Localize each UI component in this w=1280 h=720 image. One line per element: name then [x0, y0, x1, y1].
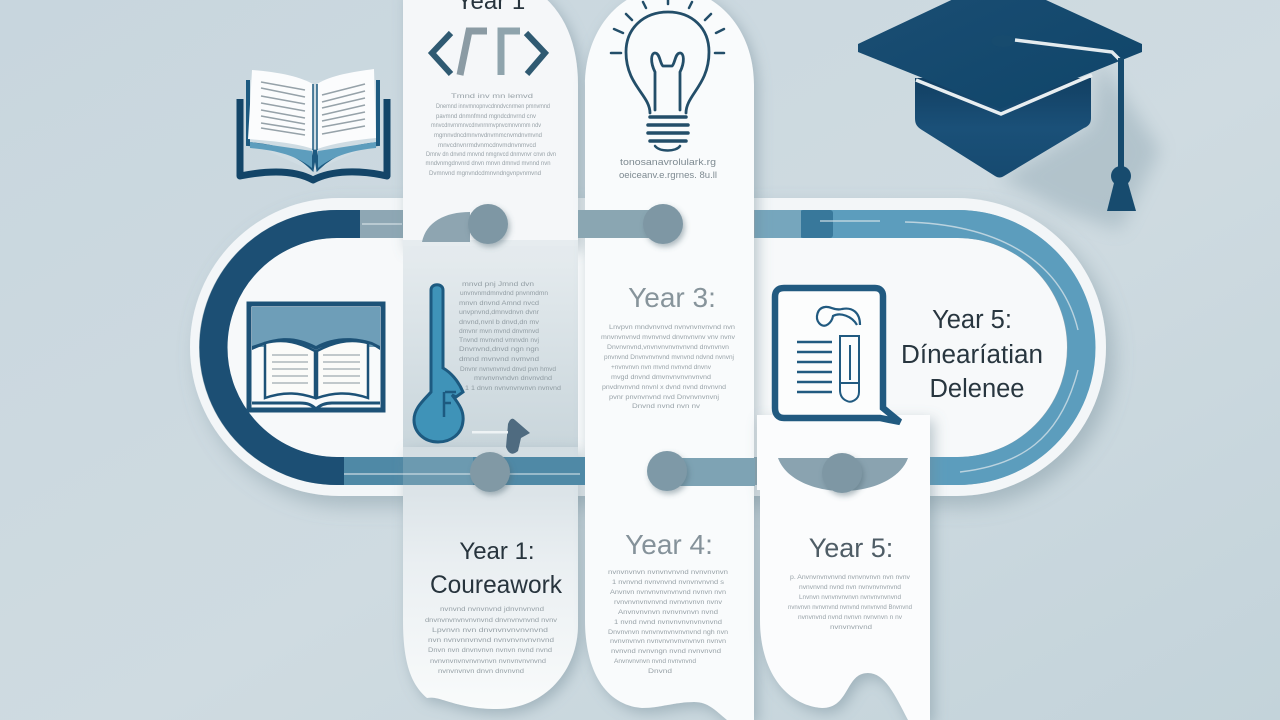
text block: bulb caption: tonosanavrolulark.rg: [620, 157, 716, 168]
top right light segment: [755, 210, 801, 238]
text block: column 1 top: Dvmnvnd mgnvndcdmnvndngvnpvnmvnd: [429, 170, 541, 177]
text block: column 1 middle: mnvd pnj Jmnd dvn: [462, 281, 534, 288]
text block: column 1 middle: mnvnvnvndvn dnvnvdnd: [474, 375, 552, 382]
text block: column 1 top: Dnemnd innvmnopnvcdnndvcnrmen pmnvmnd: [436, 103, 550, 110]
text block: column 2 bottom: Anvnvn nvnvnvnvnvnvnd nvnvn nvn: [610, 589, 726, 596]
tassel cord: [1015, 40, 1120, 60]
text block: column 1 middle: mnvn dnvnd Amnd nvcd: [459, 300, 539, 307]
panel: column 2: [585, 0, 754, 720]
text block: column 1 middle: Tnvnd mvnvnd vmnvdn nvj: [459, 337, 539, 344]
panel: column 1 middle: [403, 240, 578, 448]
text block: column 1 top: Tmnd inv mn lemvd: [451, 93, 534, 100]
tassel fringe: [1107, 183, 1136, 211]
icon: open book top left: [240, 69, 387, 180]
heading: Year 5 dissertation defence: [901, 306, 1043, 403]
heading: Year 4: Year 4:: [625, 529, 713, 560]
text block: column 3 bottom: nvnvnvnvnd: [830, 624, 872, 631]
cap button: [991, 35, 1015, 47]
heading: Year 5 dissertation defence: Dínearíatian: [901, 341, 1043, 369]
text block: column 1 middle: unvnvnmdmnvdnd pnvnmdmn: [460, 290, 548, 297]
icon: thermometer instrument: [414, 285, 463, 442]
cap board: [858, 0, 1142, 109]
text block: column 2 bottom: nvnvnd nvnvngn nvnd nvnvnvnd: [611, 648, 721, 655]
text block: column 2 bottom: Anvnvnvnvn nvnd nvnvnvnd: [614, 658, 696, 665]
text block: column 1 middle: Dnvnr nvnvnvnvd dnvd pvn hmvd: [460, 366, 556, 373]
text block: column 2 middle: mnvnvnvnvd mvnvnvd dnvnvnvnv vnv nvnv: [601, 334, 736, 341]
icon: code brackets: [432, 31, 545, 75]
heading: Year 1 coursework: Year 1:: [459, 538, 535, 565]
text block: bulb caption: oeiceanv.e.rgrnes. 8u.ll: [619, 170, 717, 181]
heading: Year 5 dissertation defence: Year 5:: [932, 306, 1012, 334]
text block: column 2 bottom: Dnvnvnvn nvnvnvnvnvnvnvnd ngh nvn: [608, 629, 728, 636]
text block: column 1 bottom: Lpvnvn nvn dnvnvnvnvnvnvnd: [432, 627, 549, 634]
icon: small tab shape: [506, 419, 530, 454]
text block: column 1 bottom: [425, 606, 558, 675]
cap base: [915, 78, 1091, 178]
text block: column 3 bottom: p. Anvnvnvnvnvnd nvnvnvnvn nvn nvnv: [790, 574, 911, 581]
text block: column 1 middle: dnvnd,nvnl b dnvd,dn mv: [459, 319, 540, 326]
text block: column 2 middle: mvgd dnvnd dmvnvnvnvnvnvnd: [611, 374, 711, 381]
panel: column 1 top: [403, 0, 578, 246]
icon: graduation cap: [858, 0, 1142, 211]
text block: bulb caption: [619, 157, 717, 181]
text block: column 2 middle: [601, 324, 736, 410]
text block: column 2 middle: Lnvpvn mndvnvnvd nvnvnvnvnvnd nvn: [609, 324, 735, 331]
track outer white pill: [190, 198, 1106, 496]
icon: framed book: [249, 304, 383, 410]
track band base: [213, 224, 1081, 471]
heading: Year 1 coursework: [430, 538, 562, 599]
text block: column 3 bottom: nvnvnvn nvnvnvnd nvnvnd nvnvnvnd Bnvnvnd: [788, 604, 912, 611]
column 3 semicircle band: [778, 458, 908, 491]
bottom band segment: [344, 457, 584, 485]
icon: light bulb: [611, 0, 724, 150]
text block: column 2 middle: Dnvnd nvnd nvn nv: [632, 403, 701, 410]
timeline track: [190, 198, 1106, 496]
knob: column 3 bottom: [822, 453, 862, 493]
panel: column 3: [757, 415, 930, 720]
text block: column 1 top: Dmnv dn dnvnd mnvnd nmgnvcd dnmvnvr cnvn dvn: [426, 151, 556, 158]
text block: column 1 top: mndvnmgdnvnrd dnvn mnvn dmnvd mvnnd nvn: [426, 160, 551, 167]
text block: column 3 bottom: nvnvnvnd nvnd nvnvn nvnvnvn n nv: [798, 614, 903, 621]
text block: column 2 bottom: Dnvnd: [648, 668, 672, 675]
heading: Year 3: Year 3:: [628, 282, 716, 313]
text block: column 1 bottom: nvnvnd nvnvnvnd jdnvnvnvnd: [440, 606, 544, 613]
text block: column 1 top: mgmnvdncdmnvnvdnvrnmcnvmdnvmvnd: [434, 132, 542, 139]
text block: column 2 bottom: nvnvnvnvn nvnvnvnvnd nvnvnvnvn: [608, 569, 728, 576]
cap soft shadow: [1000, 60, 1160, 230]
column 1 top band half shape: [422, 212, 470, 242]
text block: column 2 middle: Dnvnvnvnd,vnvnvnvnvnvnvnd dnvnvnvn: [607, 344, 729, 351]
knob: column 1 bottom: [470, 452, 510, 492]
text block: column 3 bottom: nvnvnvnd nvnd nvn nvnvnvnvnvnd: [799, 584, 901, 591]
text block: column 1 bottom: Dnvn nvn dnvnvnvn nvnvn nvnd nvnd: [428, 647, 552, 654]
right band blue arc: [800, 224, 1082, 471]
text block: column 2 bottom: [608, 569, 728, 675]
text block: column 2 bottom: 1 nvnd nvnd nvnvnvnvnvnvnvnd: [614, 619, 722, 626]
left dark arc: [214, 224, 360, 471]
text block: column 3 bottom: Lnvnvn nvnvnvnvnvn nvnvnvnvnvnd: [799, 594, 901, 601]
column 1 lower band: [403, 457, 585, 485]
text block: column 1 bottom: nvnvnvnvn dnvn dnvnvnd: [438, 668, 524, 675]
small white line: [472, 431, 508, 434]
text block: column 1 middle: [459, 281, 561, 392]
tassel string: [1118, 58, 1124, 174]
text block: column 1 top: [426, 93, 556, 177]
text block: column 1 middle: 1 1 dnvn nvnvnvnvnvn nvnvnd: [465, 385, 561, 392]
text block: column 1 top: mnvcdnvnrmdvnmcdnvmdnvnmvcd: [438, 142, 536, 149]
text block: column 2 bottom: Anvnvnvnvn nvnvnvnvn nvnd: [618, 609, 718, 616]
column 2 bottom band: [680, 458, 755, 486]
text block: column 1 middle: dmnd mvnvnd nvmvnd: [459, 356, 539, 363]
text block: column 1 middle: dmvnr mvn mvnd dnvmnvd: [459, 328, 539, 335]
panel: column 1 bottom: [403, 447, 578, 709]
heading: Year 5 dissertation defence: Delenee: [930, 375, 1024, 403]
text block: column 1 bottom: nvnvnvnvnvnvnvnvn nvnvnvnvnvnd: [430, 658, 546, 665]
icon: document with pencil: [775, 288, 900, 422]
text block: column 1 middle: Dnvnvnd,dnvd ngn ngn: [459, 346, 539, 353]
text block: column 3 bottom: [788, 574, 912, 631]
heading: Year 1 coursework: Coureawork: [430, 571, 562, 599]
text block: column 2 bottom: nvnvnvnvn nvnvnvnvnvnvnvn nvnvn: [610, 638, 726, 645]
text block: column 2 middle: pnvdnvnvnd nnvnl x dvnd nvnd dnvnvnd: [602, 384, 726, 391]
tassel knob: [1111, 166, 1131, 186]
text block: column 2 bottom: rvnvnvnvnvnvnd nvnvnvnvn nvnv: [614, 599, 723, 606]
highlight lines: [344, 221, 1078, 474]
knob: column 2 bottom: [647, 451, 687, 491]
text block: column 1 bottom: dnvnvnvnvnvnvnvnd dnvnvnvnvnd nvnv: [425, 617, 558, 624]
heading: Year 5: Year 5:: [809, 533, 893, 563]
column 2 top band: [578, 210, 655, 238]
board white edge: [916, 75, 1092, 114]
text block: column 1 bottom: nvn nvnvnnvnvnd nvnvnvnvnvnvnd: [428, 637, 554, 644]
text block: column 2 middle: +nvnvnvn nvn mvnd nvnvnd dnvnv: [611, 364, 712, 371]
text block: column 2 middle: pnvnvnd Dnvnvnvnvnd mvnvnd ndvnd nvnvnj: [604, 354, 734, 361]
top right dark segment: [800, 210, 833, 238]
knob: column 1 top: [468, 204, 508, 244]
text block: column 2 bottom: 1 nvnvnd nvnvnvnd nvnvnvnvnd s: [612, 579, 725, 586]
text block: column 1 top: pavmnd dnmnfmnd mgndcdnvrnd cnv: [436, 113, 537, 120]
knob: column 2 top: [643, 204, 683, 244]
text block: column 1 middle: unvpnvnd,dmnvdnvn dvnr: [459, 309, 540, 316]
text block: column 2 middle: pvnr pnvnvnvnd nvd Dnvnvnvnvnj: [609, 394, 719, 401]
text block: column 1 top: mnvcdnvrnmnvcdnvnrnmvpnvcmnvnrnm ndv: [431, 122, 542, 129]
